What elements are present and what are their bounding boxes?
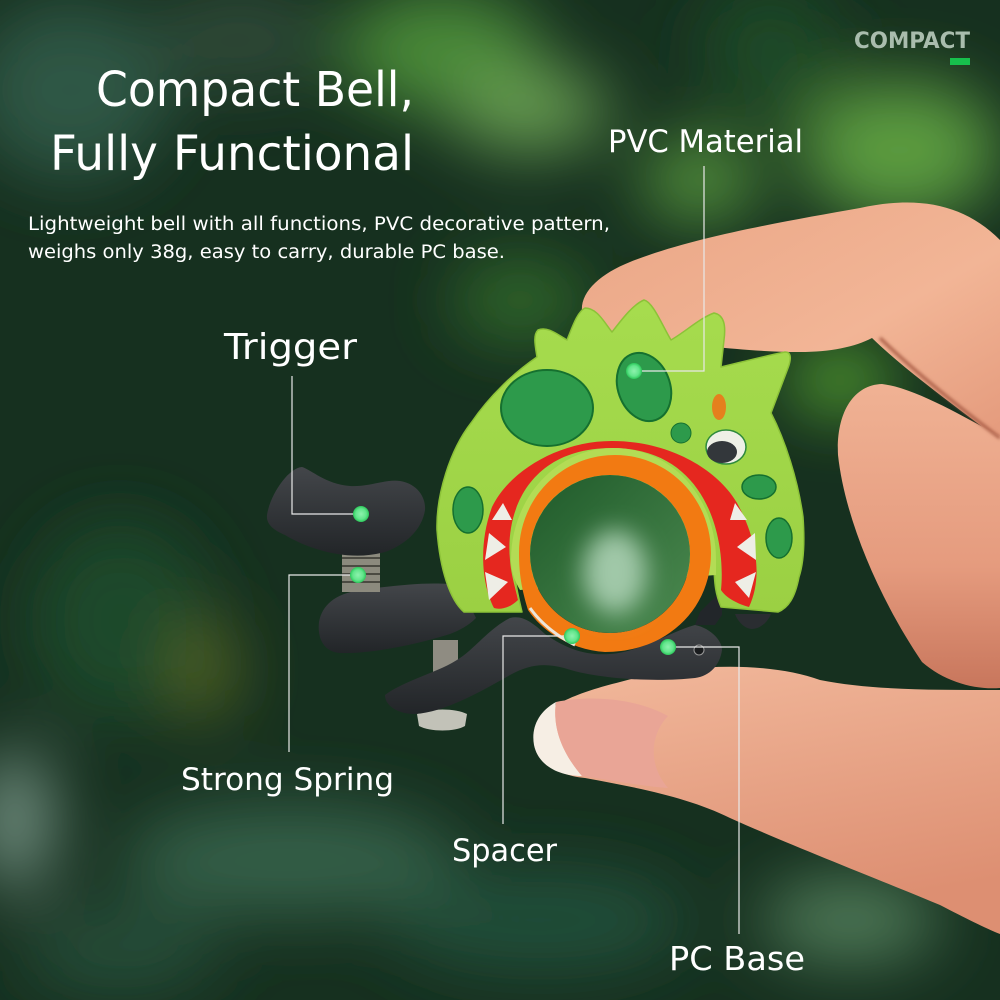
callout: Trigger (223, 327, 369, 522)
hand: middle finger (838, 338, 1000, 688)
hand: top finger (582, 203, 1000, 440)
badge: COMPACT (854, 29, 970, 65)
bell: PC base and lever (319, 583, 771, 730)
bell: orange ring with window (511, 448, 716, 652)
bell: green dinosaur cover (437, 300, 804, 612)
description: Lightweight bell with all functions, PVC decorative pattern, (28, 214, 610, 235)
callout: Trigger: Trigger (223, 327, 357, 368)
bell: trigger (267, 467, 425, 592)
description (28, 214, 610, 263)
title: Compact Bell, (96, 62, 414, 118)
callout: Strong Spring: Strong Spring (181, 762, 394, 798)
callout: Strong Spring (181, 567, 394, 798)
description: weighs only 38g, easy to carry, durable PC base. (28, 242, 505, 263)
badge: COMPACT: COMPACT (854, 29, 970, 54)
bell mouth (483, 441, 757, 609)
title: Fully Functional (50, 126, 414, 182)
callout: PVC Material (608, 124, 803, 379)
title (50, 62, 414, 182)
bell spots (501, 370, 593, 446)
callout: Spacer: Spacer (452, 833, 557, 869)
callout: PC Base: PC Base (669, 939, 805, 978)
callout: PC Base (660, 639, 805, 978)
callout: Spacer (452, 628, 580, 869)
callout: PVC Material: PVC Material (608, 124, 803, 160)
hand: thumb (533, 667, 1000, 934)
